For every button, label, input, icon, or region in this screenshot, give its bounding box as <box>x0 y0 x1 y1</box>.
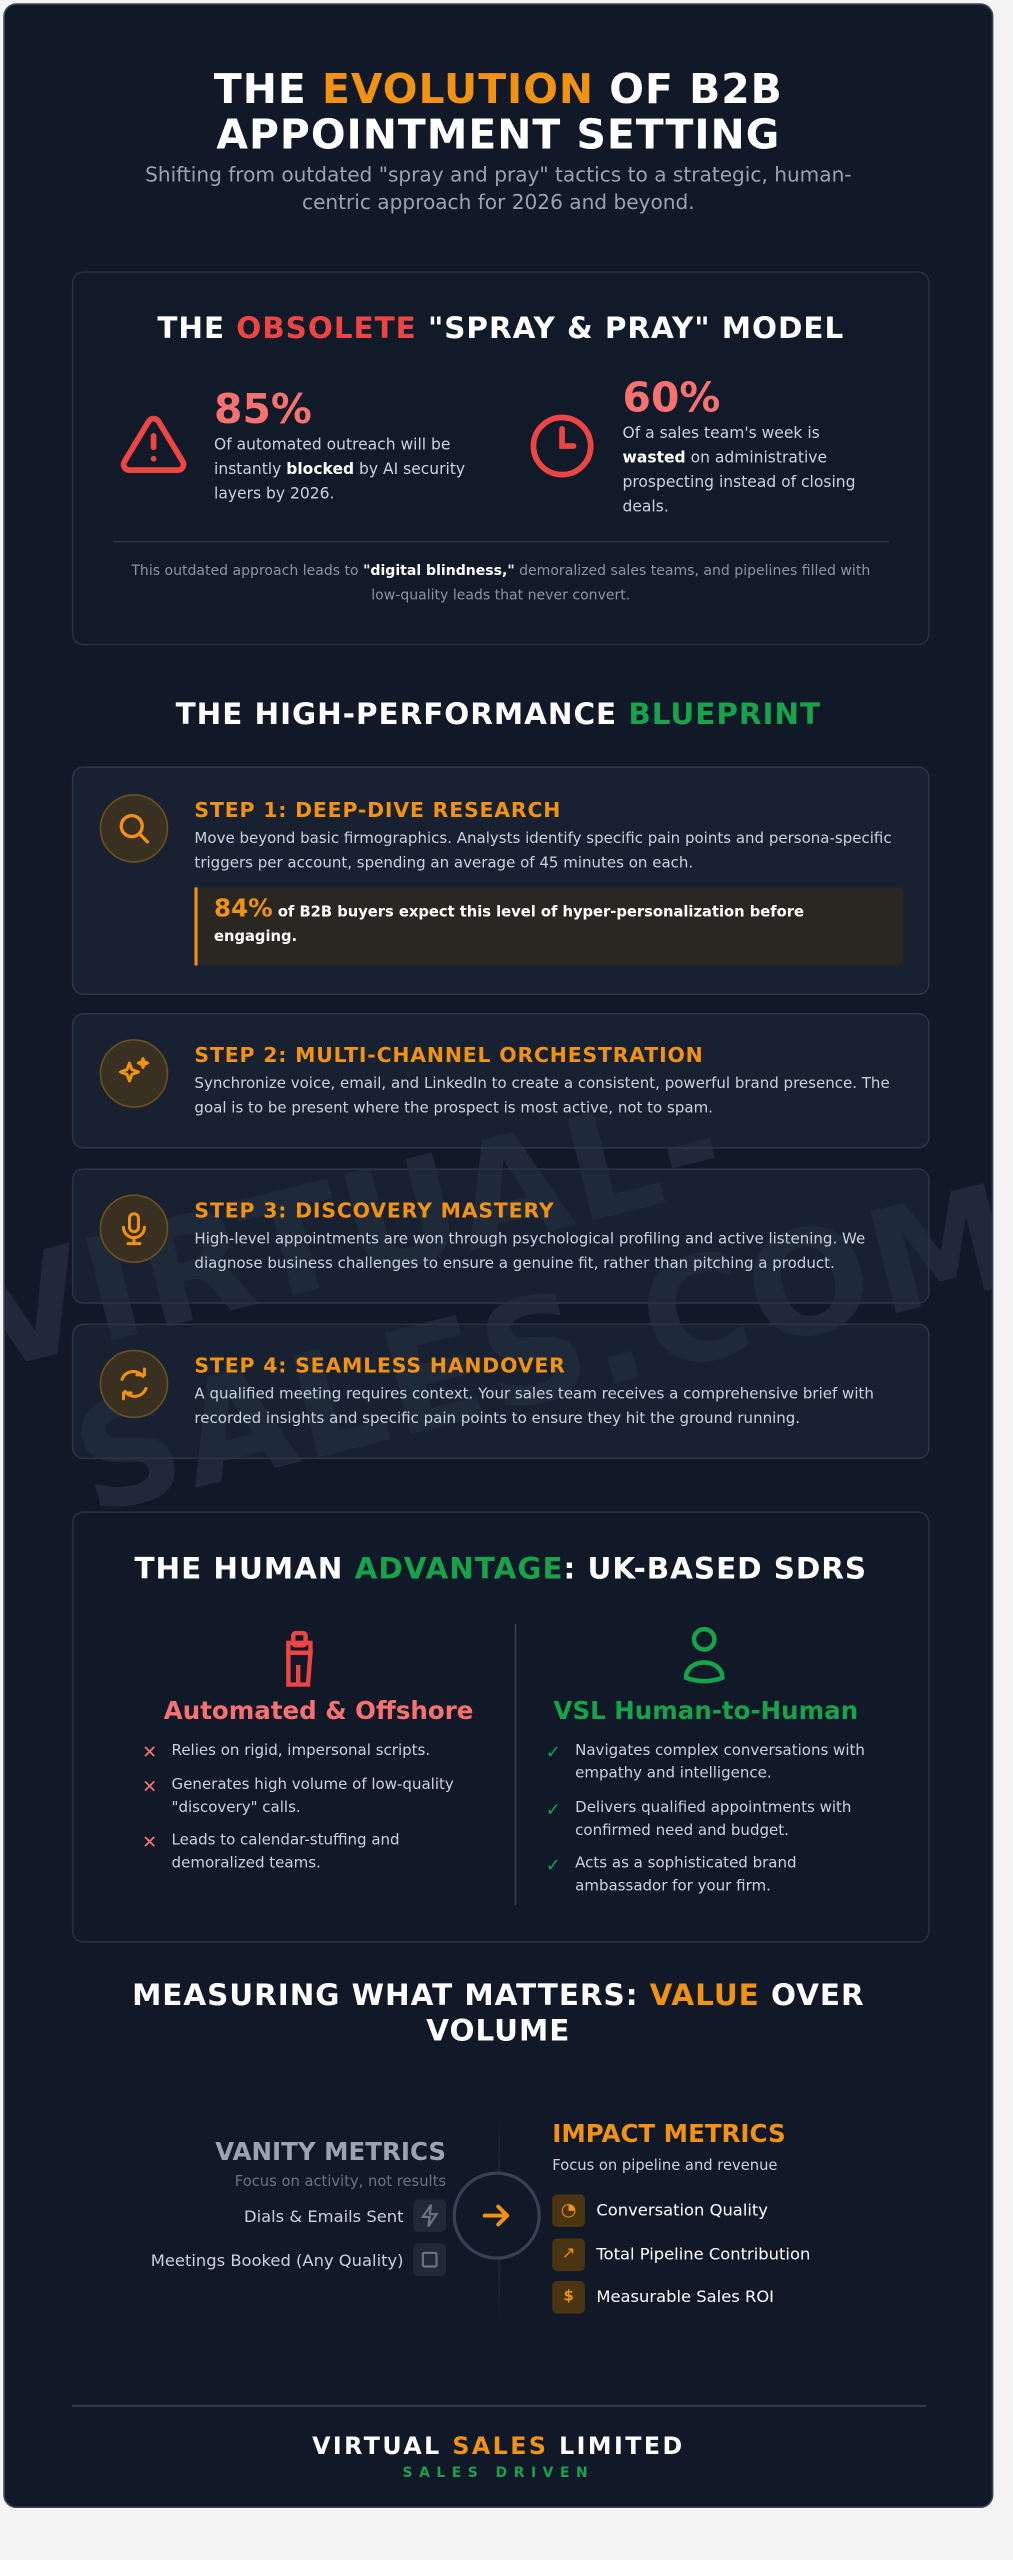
panel: human advantage: ✓ <box>546 1742 561 1763</box>
stat 85%: 85% <box>214 386 312 433</box>
callout: 84% <box>194 887 904 966</box>
stat 60% <box>623 374 855 516</box>
background card: ◔ <box>561 2199 576 2220</box>
callout: 84%: 84% of B2B buyers expect this level of hyper-personalization before engaging. <box>214 894 804 946</box>
icon: robot <box>286 1630 313 1687</box>
background card: Conversation Quality <box>596 2202 768 2220</box>
icon: sparkles <box>100 1039 168 1108</box>
panel: human advantage: ✓ <box>546 1854 561 1876</box>
background card: Measurable Sales ROI <box>596 2289 774 2307</box>
footer brand: VIRTUAL SALES LIMITED <box>312 2435 685 2461</box>
impact metrics <box>552 2119 810 2314</box>
column: human: VSL Human-to-Human <box>554 1696 858 1725</box>
heading: blueprint: THE HIGH-PERFORMANCE BLUEPRINT <box>176 698 821 732</box>
summary text: This outdated approach leads to "digital blindness," demoralized sales teams, and pipelines filled with low-quality leads that never convert. <box>131 564 870 605</box>
icon: microphone <box>100 1194 168 1263</box>
panel: human advantage: ✓ <box>546 1799 561 1820</box>
step 2 text: Synchronize voice, email, and LinkedIn to create a consistent, powerful brand presence. The goal is to be present where the prospect is most active, not to spam. <box>194 1075 890 1118</box>
panel: human advantage: Acts as a sophisticated brand ambassador for your firm. <box>575 1854 797 1895</box>
metrics divider line <box>498 2113 500 2325</box>
footer brand: SALES DRIVEN <box>403 2466 594 2482</box>
icon: center arrow <box>453 2171 541 2260</box>
step 3 card <box>72 1168 930 1304</box>
heading: THE HUMAN ADVANTAGE: UK-BASED SDRS <box>134 1552 867 1587</box>
background card: ↗ <box>562 2245 575 2263</box>
step 1 card <box>72 766 930 995</box>
panel: human advantage: Navigates complex conversations with empathy and intelligence. <box>575 1742 865 1783</box>
stat 85%: Of automated outreach will be instantly blocked by AI security layers by 2026. <box>214 436 465 503</box>
stat 60%: Of a sales team's week is wasted on administrative prospecting instead of closing deals. <box>623 425 855 516</box>
step 2 title: STEP 2: MULTI-CHANNEL ORCHESTRATION <box>194 1042 704 1067</box>
panel: human advantage: Generates high volume of low-quality "discovery" calls. <box>172 1776 454 1817</box>
vanity metrics <box>151 2137 446 2276</box>
heading: measuring: MEASURING WHAT MATTERS: VALUE OVER VOLUME <box>132 1979 865 2049</box>
vanity metrics: Focus on activity, not results <box>235 2175 446 2191</box>
vanity metrics: VANITY METRICS <box>215 2137 446 2167</box>
icon: clock <box>530 414 594 478</box>
icon: refresh <box>100 1350 168 1418</box>
background card: Meetings Booked (Any Quality) <box>151 2253 404 2271</box>
icon: search <box>100 794 168 863</box>
icon: warning <box>120 416 186 473</box>
stat 60%: 60% <box>623 374 720 422</box>
background card: $ <box>563 2289 574 2305</box>
step 1 title: STEP 1: DEEP-DIVE RESEARCH <box>194 797 561 822</box>
step 4 text: A qualified meeting requires context. Your sales team receives a comprehensive brief with recorded insights and specific pain points to ensure they hit the ground running. <box>194 1386 874 1428</box>
heading: THE OBSOLETE "SPRAY & PRAY" MODEL <box>157 312 844 346</box>
panel: human advantage: ✕ <box>142 1776 157 1797</box>
panel: human advantage <box>72 1511 930 1943</box>
title: APPOINTMENT SETTING <box>216 111 780 158</box>
background card: Total Pipeline Contribution <box>596 2247 810 2265</box>
step 2 card <box>72 1013 930 1149</box>
impact metrics: IMPACT METRICS <box>552 2119 786 2149</box>
step 4 card <box>72 1323 930 1459</box>
column: automated: Automated & Offshore <box>164 1696 473 1725</box>
panel: human advantage: Leads to calendar-stuffing and demoralized teams. <box>172 1832 400 1872</box>
column: automated <box>142 1696 473 1872</box>
step 4 title: STEP 4: SEAMLESS HANDOVER <box>194 1353 566 1377</box>
subtitle: Shifting from outdated "spray and pray" tactics to a strategic, human-centric approach for 2026 and beyond. <box>145 163 852 214</box>
background card: Dials & Emails Sent <box>244 2209 404 2227</box>
step 3 title: STEP 3: DISCOVERY MASTERY <box>194 1198 554 1222</box>
title <box>214 65 783 158</box>
footer brand <box>312 2435 685 2482</box>
title: THE EVOLUTION OF B2B <box>214 65 783 113</box>
step 1 text: Move beyond basic firmographics. Analysts identify specific pain points and persona-specific triggers per account, spending an average of 45 minutes on each. <box>194 830 892 873</box>
panel: human advantage: ✕ <box>142 1742 157 1763</box>
panel: human advantage: ✕ <box>142 1832 157 1853</box>
panel: obsolete model <box>72 271 930 645</box>
step 3 text: High-level appointments are won through psychological profiling and active listening. We diagnose business challenges to ensure a genuine fit, rather than pitching a product. <box>194 1230 865 1273</box>
panel: human advantage: Delivers qualified appointments with confirmed need and budget. <box>575 1799 851 1840</box>
panel: human advantage: Relies on rigid, impersonal scripts. <box>172 1742 430 1760</box>
icon: person <box>684 1626 725 1684</box>
column: human <box>546 1696 865 1895</box>
impact metrics: Focus on pipeline and revenue <box>552 2158 777 2175</box>
stat 85% <box>214 386 465 503</box>
